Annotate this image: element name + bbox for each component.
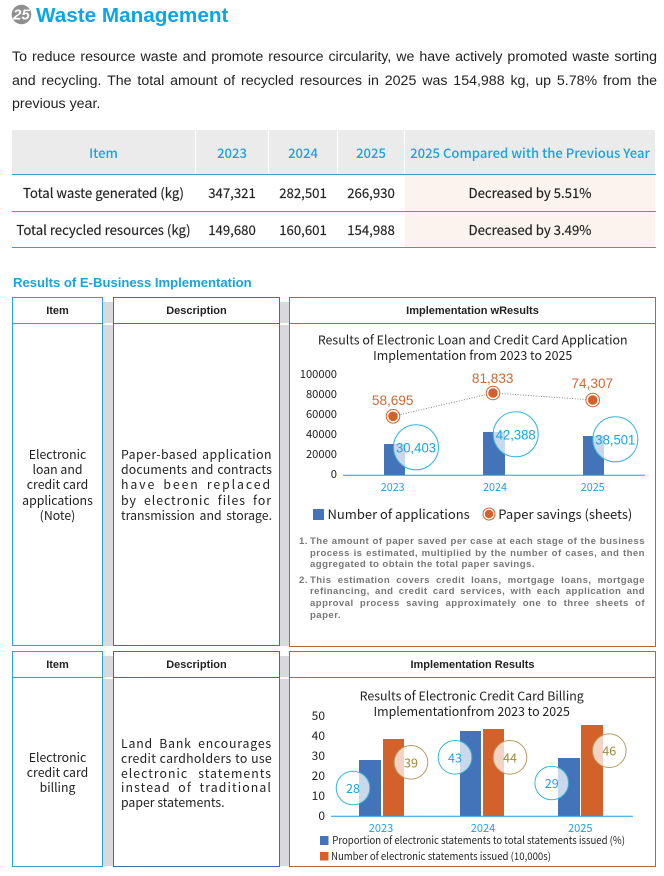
header: comparison: 2025 Compared with the Previous Year [410,142,650,162]
chart: electronic credit card billing [312,686,633,863]
y axis labels: 100000 [300,366,337,382]
value labels: applications [396,426,635,455]
value labels: paper savings: 58,695 [372,393,413,408]
header: item: Item [89,142,118,162]
row: total recycled resources: Total recycled resources (kg) [16,220,191,238]
item name [27,748,88,796]
markers: paper savings [386,386,600,423]
value labels: paper savings: 81,833 [472,371,513,386]
value labels: number [404,741,616,771]
chart title [318,330,628,364]
description text: credit cardholders to use [121,749,272,767]
column heading [114,298,279,324]
footnotes: paper. [310,610,341,621]
year labels: 2024 [483,479,507,495]
row: total recycled resources: 154,988 [347,220,395,238]
value labels: applications: 42,388 [496,426,536,442]
column heading: Implementation Results [410,658,535,670]
panel: description, electronic billing [113,651,280,867]
item name: billing [40,778,75,796]
legend: Number of applications [328,504,470,523]
footnotes: refinancing, and credit card services, with each application and [310,586,645,597]
item name: (Note) [40,506,75,524]
item name [22,445,93,524]
legend [313,504,632,523]
year labels [381,479,605,495]
description text: Paper-based application [121,445,272,463]
description text: transmission and storage. [121,506,272,524]
description text: instead of traditional [121,778,272,796]
year labels: 2023 [381,479,405,495]
chart title [360,686,584,720]
footnotes: 1. [299,536,308,547]
description text: Land Bank encourages [121,734,272,752]
year labels: 2023 [369,820,393,836]
footnotes: The amount of paper saved per case at each stage of the business [310,536,645,547]
intro paragraph: previous year. [12,96,100,112]
row: total recycled resources: 149,680 [208,220,256,238]
header: 2025: 2025 [356,142,386,162]
value labels: proportion: 43 [448,747,462,766]
y axis labels: 50 [312,707,325,724]
y axis labels: 10 [312,787,325,804]
section heading: Results of E-Business Implementation [13,275,252,290]
column heading: Item [46,304,69,316]
header: item [12,130,195,174]
y axis labels: 20 [312,767,325,784]
y axis labels: 60000 [306,406,337,422]
description text: paper statements. [121,793,225,811]
value labels: proportion: 29 [545,773,559,792]
column heading [290,298,655,324]
row: total recycled resources: 160,601 [279,220,327,238]
y axis labels: 40000 [306,426,337,442]
column heading [13,652,102,678]
footnotes: 2. [299,575,308,586]
legend: Number of electronic statements issued (10,000s) [331,848,551,863]
dotted trend line [393,393,593,416]
header: 2023 [196,130,268,174]
value labels: paper savings: 74,307 [572,376,613,391]
y axis labels [300,366,337,482]
column heading: Description [166,304,227,316]
column heading [290,652,655,678]
footnotes: approval process saving approximately one to three sheets of [310,598,645,609]
value labels: applications: 30,403 [396,439,436,455]
legend [320,832,625,863]
y axis labels [312,707,325,824]
item name: credit card [27,475,88,493]
item name: applications [22,491,93,509]
panel: description, electronic applications [113,297,280,646]
y axis labels: 0 [318,807,325,824]
row: total waste generated: Decreased by 5.51% [469,182,591,202]
item name: Electronic [29,445,86,463]
description text [121,445,272,524]
year labels: 2025 [581,479,605,495]
header: 2023: 2023 [217,142,247,162]
row: total waste generated: 347,321 [208,182,256,202]
intro paragraph [12,49,657,112]
year labels: 2025 [568,820,593,836]
value circles: number [394,734,626,779]
year labels [369,820,593,836]
value labels: number: 46 [602,741,616,760]
intro paragraph: To reduce resource waste and promote resource circularity, we have actively promoted waste sorting [12,49,657,65]
header: 2024: 2024 [288,142,318,162]
value labels: number: 44 [503,747,517,766]
column heading [114,652,279,678]
column heading: Item [46,658,69,670]
footnotes: aggregated to obtain the total paper savings. [310,559,535,570]
footnotes: process is estimated, multiplied by the number of cases, and then [310,548,645,559]
header: 2024 [269,130,337,174]
x axis [343,474,645,476]
legend: Paper savings (sheets) [498,504,632,523]
icon: 25 badge: 25 [12,6,30,24]
item name: Electronic [29,748,86,766]
y axis labels: 20000 [306,446,337,462]
description text: electronic statements [121,764,272,782]
gray column gutters [103,302,113,646]
description text: by electronic files for [121,491,272,509]
waste data table [12,130,656,248]
intro paragraph: and recycling. The total amount of recycled resources in 2025 was 154,988 kg, up 5.78% from the [12,72,657,88]
description text [121,734,272,811]
footnotes [299,536,645,621]
row: total waste generated: Total waste generated (kg) [23,182,184,202]
row: total waste generated [23,182,591,202]
panel: item, electronic applications [12,297,103,646]
y axis labels: 30 [312,747,325,764]
chart title: Implementation from 2023 to 2025 [373,346,572,364]
row: total recycled resources [16,220,591,238]
y axis labels: 80000 [306,386,337,402]
value labels: applications: 38,501 [595,431,635,447]
value labels: proportion [346,747,559,797]
chart title: Results of Electronic Loan and Credit Card Application [318,330,628,348]
chart title: Implementationfrom 2023 to 2025 [374,702,570,720]
header: comparison [405,130,655,174]
year labels: 2024 [471,820,495,836]
column heading: Implementation wResults [406,304,539,316]
row: total waste generated: 282,501 [279,182,327,202]
value labels: proportion: 28 [346,778,360,797]
footnotes: This estimation covers credit loans, mortgage loans, mortgage [310,575,645,586]
comparison cell background [405,175,655,247]
bars: number of applications [384,432,604,475]
description text: documents and contracts [121,460,272,478]
bars: number of electronic statements [383,725,603,816]
panel: item, electronic billing [12,651,103,867]
title: Waste Management [36,4,228,27]
item name: loan and [32,460,82,478]
panel: implementation results, electronic applications [289,297,656,647]
chart title: Results of Electronic Credit Card Billing [360,686,584,704]
header: 2025 [338,130,404,174]
bars: proportion of electronic statements [359,731,580,816]
column heading: Description [166,658,227,670]
column heading [13,298,102,324]
y axis labels: 40 [312,727,325,744]
x axis [331,815,633,817]
y axis labels: 0 [331,466,337,482]
value labels: number: 39 [404,752,418,771]
chart: electronic loan and credit card applications [300,330,645,523]
value circles: proportion [336,740,568,805]
legend: Proportion of electronic statements to total statements issued (%) [332,832,625,847]
item name: credit card [27,763,88,781]
value labels: paper savings [372,371,613,408]
row: total recycled resources: Decreased by 3.49% [469,220,591,238]
description text: have been replaced [121,475,272,493]
value circles [394,412,638,470]
row: total waste generated: 266,930 [347,182,395,202]
panel: implementation results, electronic billing [289,651,656,867]
